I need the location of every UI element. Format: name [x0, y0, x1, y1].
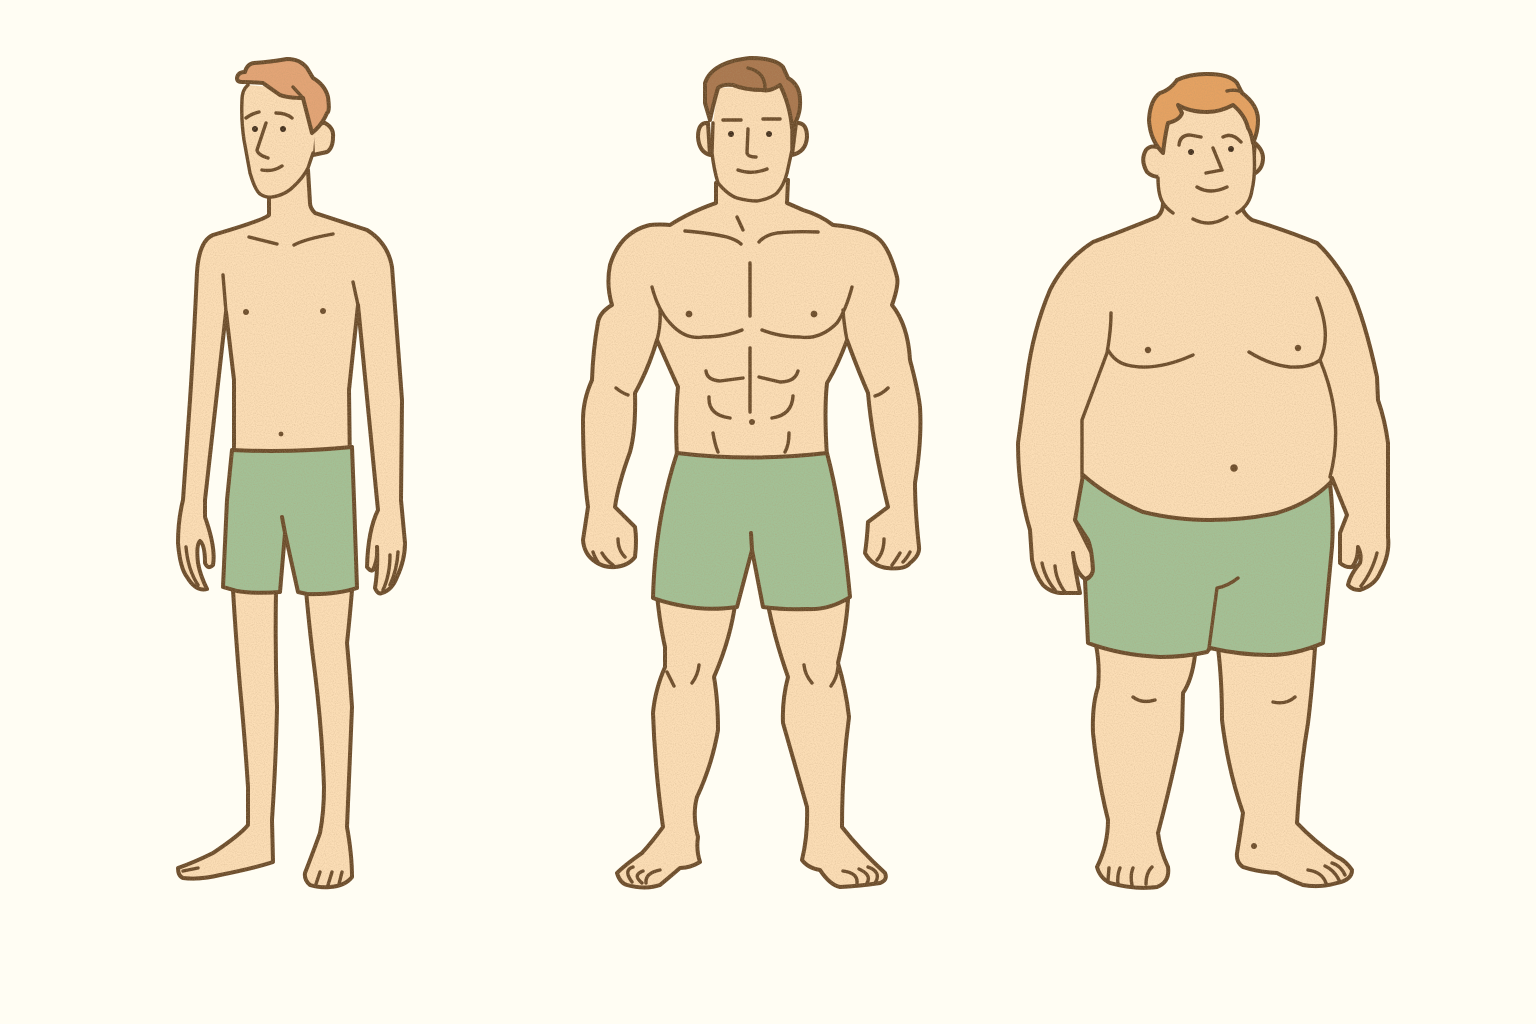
muscular man: torso and arms [583, 180, 920, 568]
muscular man: pectoral lines [652, 287, 852, 340]
muscular man: face fill [712, 85, 792, 201]
slim man: torso and arms [178, 170, 405, 593]
brows, nose and mouth [723, 119, 780, 172]
muscular man: toes [628, 867, 877, 883]
heavy man: chest folds [1108, 350, 1320, 367]
heavy man: right leg and foot [1218, 648, 1352, 886]
muscular man: abdominal lines [706, 371, 798, 452]
slim man: hair [237, 59, 329, 133]
muscular man: knee creases [667, 665, 838, 686]
heavy man: fingers [1042, 553, 1377, 592]
slim man: armpit and hand creases [186, 275, 398, 590]
muscular man: sternum and collar lines [685, 217, 818, 412]
heavy man: ears [1143, 143, 1263, 177]
heavy man: jaw and chin lines [1158, 130, 1254, 223]
heavy man: green shorts [1075, 475, 1333, 657]
eyes [1188, 146, 1234, 155]
heavy man: chest and navel dots [1145, 345, 1301, 472]
ankle dot [1251, 843, 1257, 849]
eyes [252, 126, 286, 132]
figure: muscular man [583, 58, 920, 888]
slim man: ear [312, 123, 333, 155]
muscular man: arm creases [616, 388, 888, 396]
slim man: chest and navel dots [243, 308, 326, 436]
heavy man: shorts crease [1209, 578, 1238, 648]
slim man: hair strand [293, 87, 303, 98]
heavy man: left leg and foot [1093, 645, 1195, 888]
brows, nose and mouth [1179, 135, 1241, 191]
slim man: left leg and foot [178, 590, 277, 879]
slim man: facial features [246, 112, 292, 170]
slim man: toes [183, 868, 342, 885]
slim man: face fill [242, 85, 315, 197]
muscular man: chest and navel dots [686, 311, 817, 425]
heavy man: toes and ankle dot [1108, 843, 1345, 885]
figure: slim man [178, 59, 405, 887]
muscular man: hair curl [748, 68, 765, 88]
eyes [728, 131, 772, 137]
heavy man: knee creases [1133, 697, 1295, 703]
slim man: collar bones [249, 234, 333, 245]
heavy man: hair strand [1227, 90, 1242, 92]
heavy man: arm and belly lines [1082, 298, 1336, 477]
muscular man: green shorts [653, 453, 850, 609]
figure: heavy man [1018, 74, 1388, 888]
muscular man: left leg and foot [617, 595, 735, 888]
muscular man: fingers [593, 539, 910, 565]
muscular man: right leg and foot [768, 600, 886, 887]
slim man: green shorts [223, 447, 357, 594]
heavy man: torso and arms [1018, 203, 1388, 593]
muscular man: hair [705, 58, 800, 128]
heavy man: facial features [1179, 135, 1241, 191]
muscular man: ears [698, 123, 807, 155]
brows, nose and mouth [246, 112, 292, 170]
heavy man: hair [1149, 74, 1258, 153]
muscular man: face outline [712, 123, 792, 201]
slim man: right leg and foot [305, 590, 352, 887]
muscular man: facial features [723, 119, 780, 172]
slim man: face outline [242, 85, 313, 197]
toes [1108, 863, 1345, 885]
heavy man: face fill [1158, 105, 1254, 216]
